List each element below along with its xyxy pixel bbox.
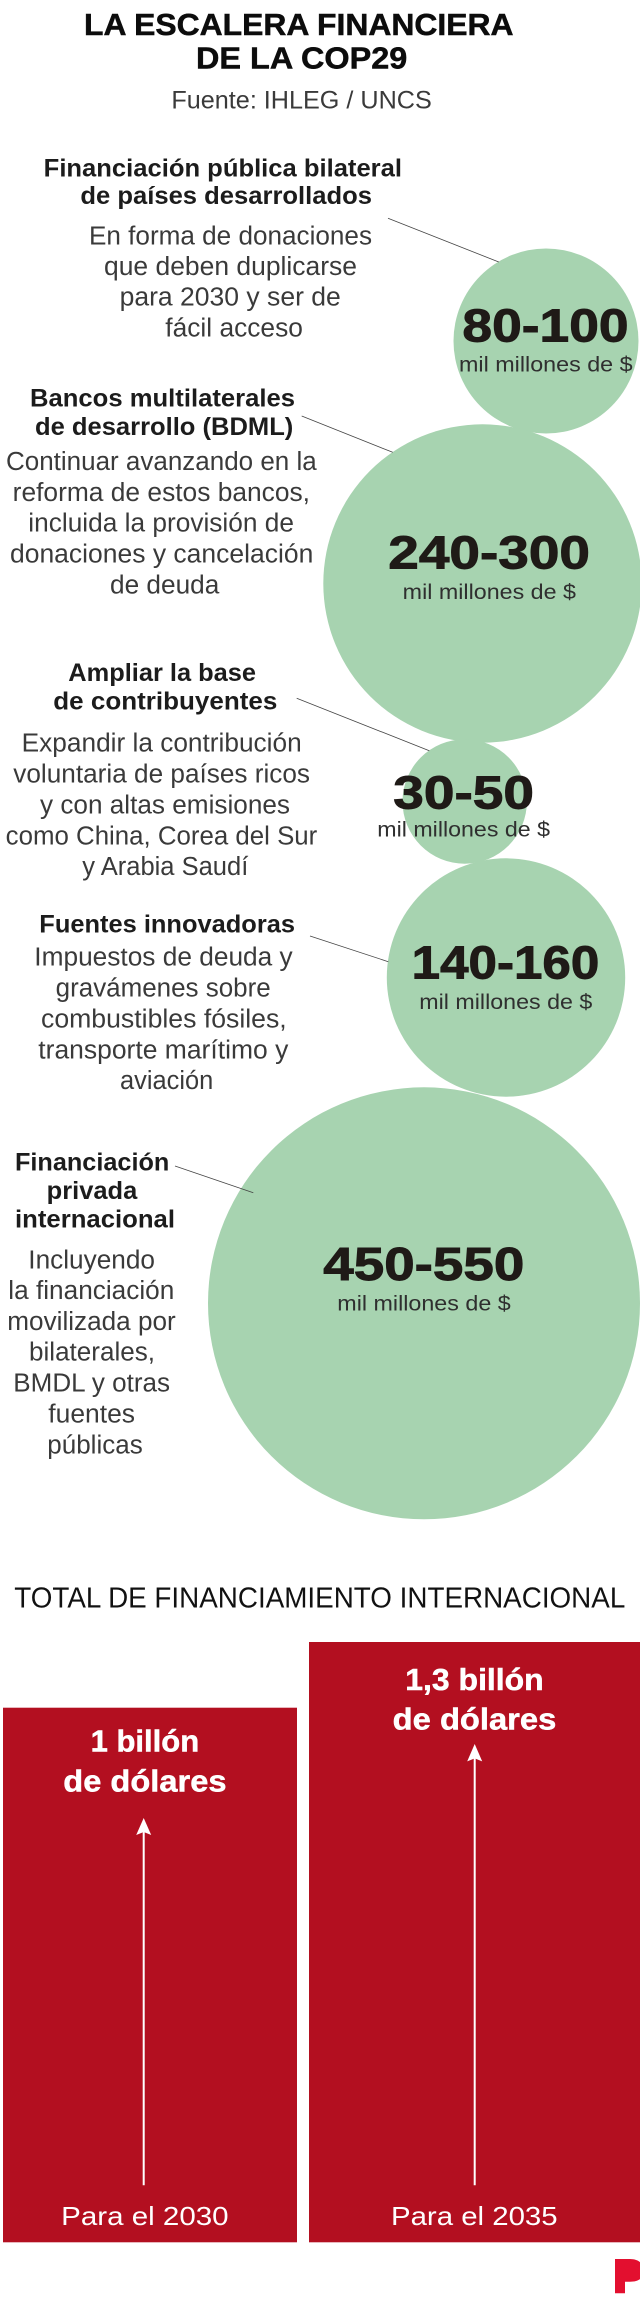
- text block: innovative sources: gravámenes sobre: [56, 975, 271, 1003]
- text block: contributor base: voluntaria de países ricos: [13, 761, 310, 789]
- heading: contributor base: Ampliar la base: [68, 659, 256, 687]
- title: LA ESCALERA FINANCIERA: [84, 7, 514, 42]
- leader line 5: [175, 1166, 253, 1193]
- text block: innovative sources: transporte marítimo y: [38, 1036, 289, 1064]
- text block: contributor base: y Arabia Saudí: [82, 853, 248, 881]
- value: 240-300: mil millones de $: [403, 581, 576, 604]
- text block: multilateral banks: donaciones y cancelación: [10, 540, 313, 568]
- heading: international private finance: [15, 1149, 175, 1234]
- heading: multilateral banks: de desarrollo (BDML): [35, 413, 293, 441]
- text block: bilateral public finance: [89, 222, 372, 343]
- value: 450-550: [323, 1238, 524, 1316]
- value: 80-100: mil millones de $: [459, 354, 633, 377]
- amount: 1,3 billón: [393, 1662, 556, 1736]
- text block: multilateral banks: reforma de estos bancos,: [13, 479, 310, 507]
- section heading: total: TOTAL DE FINANCIAMIENTO INTERNACIONAL: [14, 1583, 625, 1615]
- circle: 240-300: [323, 424, 640, 743]
- heading: bilateral public finance: [44, 155, 402, 210]
- value: 80-100: [459, 300, 633, 377]
- text block: international private finance: [7, 1246, 176, 1459]
- text block: innovative sources: aviación: [120, 1067, 213, 1095]
- heading: bilateral public finance: Financiación pública bilateral: [44, 155, 402, 183]
- value: 240-300: [388, 526, 590, 604]
- value: 450-550: mil millones de $: [337, 1293, 511, 1316]
- circle: 450-550: [208, 1087, 640, 1519]
- text block: innovative sources: Impuestos de deuda y: [34, 944, 293, 972]
- heading: contributor base: [53, 659, 277, 715]
- value: 450-550: 450-550: [323, 1238, 524, 1290]
- text block: international private finance: la financiación: [8, 1277, 174, 1305]
- text block: innovative sources: [34, 944, 293, 1095]
- value: 240-300: 240-300: [388, 526, 590, 578]
- circle: 80-100: [454, 248, 638, 434]
- value: 140-160: [412, 936, 599, 1014]
- value: 30-50: [377, 766, 550, 842]
- heading: multilateral banks: Bancos multilaterales: [30, 385, 295, 413]
- value: 140-160: mil millones de $: [419, 991, 593, 1014]
- heading: bilateral public finance: de países desarrollados: [80, 182, 372, 210]
- arrow: 2030: [136, 1818, 151, 2185]
- text block: multilateral banks: incluida la provisión de: [28, 510, 294, 538]
- text block: bilateral public finance: En forma de donaciones: [89, 222, 372, 250]
- value: 80-100: 80-100: [462, 300, 629, 352]
- text block: contributor base: y con altas emisiones: [40, 791, 290, 819]
- label: 2035: Para el 2035: [391, 2201, 558, 2231]
- heading: contributor base: de contribuyentes: [53, 687, 277, 715]
- amount: 1,3 billón: de dólares: [393, 1702, 556, 1736]
- value: 30-50: mil millones de $: [377, 819, 550, 842]
- amount: 1 billón: 1 billón: [91, 1724, 199, 1759]
- text block: contributor base: como China, Corea del Sur: [6, 822, 318, 850]
- source line: Fuente: IHLEG / UNCS: [171, 86, 432, 114]
- circle: 140-160: [387, 858, 625, 1097]
- heading: multilateral banks: [30, 385, 295, 441]
- text block: international private finance: bilaterales,: [29, 1339, 155, 1367]
- amount: 1 billón: de dólares: [63, 1763, 226, 1798]
- value: 140-160: 140-160: [412, 936, 599, 988]
- bubble chart: [208, 248, 640, 1519]
- text block: bilateral public finance: que deben duplicarse: [104, 253, 357, 281]
- text block: international private finance: BMDL y otras: [13, 1370, 170, 1398]
- icon: publisher logo: [615, 2259, 640, 2293]
- text block: bilateral public finance: para 2030 y ser de: [120, 284, 341, 312]
- text block: international private finance: Incluyendo: [28, 1246, 155, 1274]
- text block: bilateral public finance: fácil acceso: [165, 315, 303, 343]
- amount: 1 billón: [63, 1724, 226, 1798]
- text block: contributor base: [6, 730, 318, 881]
- panel: 2035 bar: [309, 1642, 640, 2242]
- panel: 2030 bar: [3, 1708, 297, 2242]
- text block: multilateral banks: Continuar avanzando en la: [6, 448, 318, 476]
- text block: contributor base: Expandir la contribución: [22, 730, 302, 758]
- title: [84, 7, 514, 75]
- heading: international private finance: internacional: [15, 1206, 175, 1234]
- label: 2030: Para el 2030: [61, 2201, 229, 2231]
- leader line 4: [310, 936, 388, 962]
- circle: 30-50: [402, 739, 527, 864]
- title: DE LA COP29: [196, 40, 407, 75]
- leader line 1: [388, 218, 499, 262]
- value: 30-50: 30-50: [393, 766, 534, 818]
- text block: multilateral banks: [6, 448, 318, 599]
- text block: international private finance: públicas: [47, 1431, 143, 1459]
- leader line 2: [302, 416, 393, 452]
- arrow: 2035: [467, 1744, 482, 2185]
- leader line 3: [297, 698, 429, 751]
- text block: international private finance: movilizada por: [7, 1308, 176, 1336]
- heading: international private finance: privada: [47, 1177, 138, 1205]
- text block: multilateral banks: de deuda: [110, 571, 220, 599]
- amount: 1,3 billón: 1,3 billón: [405, 1662, 544, 1697]
- text block: international private finance: fuentes: [48, 1400, 135, 1428]
- heading: innovative sources: Fuentes innovadoras: [39, 911, 295, 939]
- text block: innovative sources: combustibles fósiles,: [41, 1005, 287, 1033]
- heading: international private finance: Financiación: [15, 1149, 169, 1177]
